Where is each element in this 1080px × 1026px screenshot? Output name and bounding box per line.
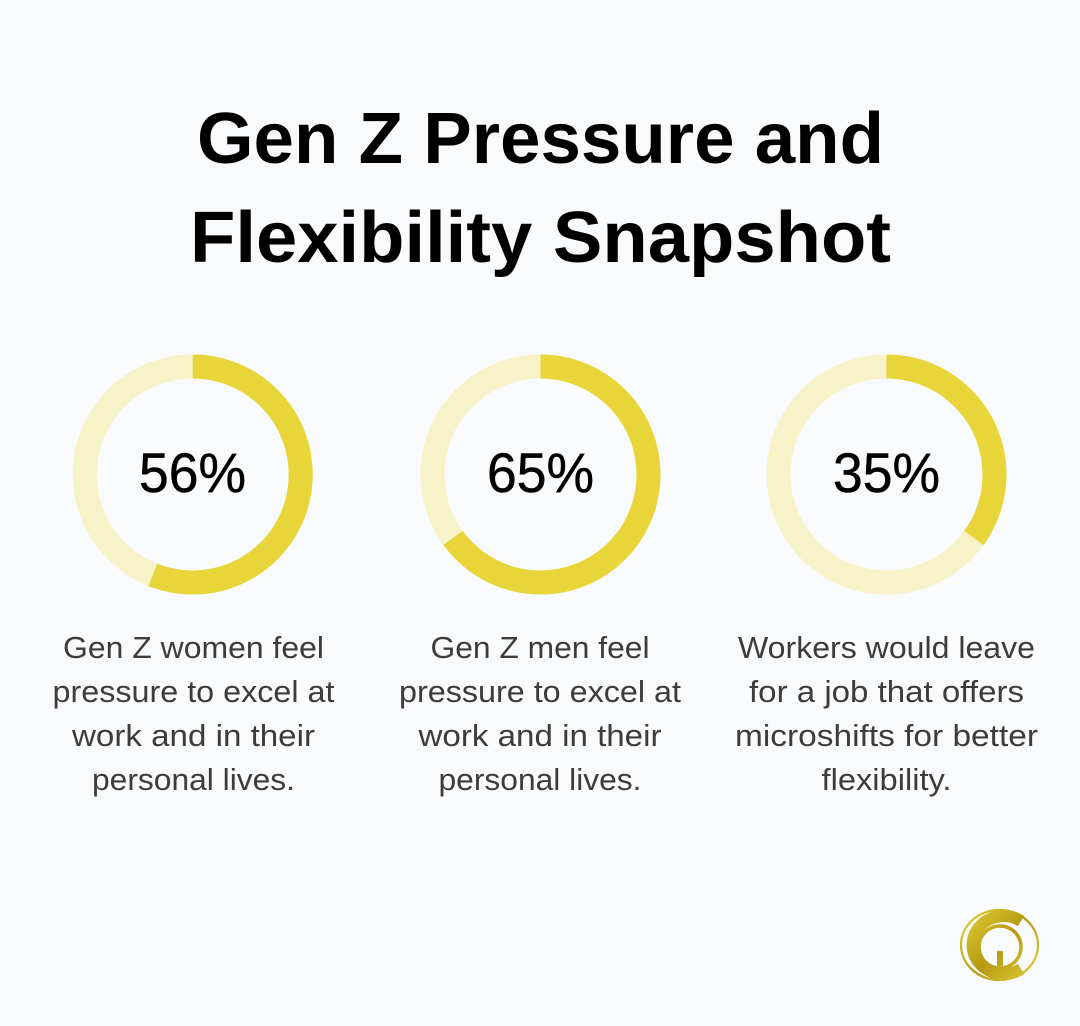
donut chart: 56%: [85, 366, 301, 582]
description: women: personal lives.: [92, 762, 295, 797]
panel: 65% men: [399, 366, 681, 797]
description: women: Gen Z women feel: [63, 630, 324, 665]
description: workers: microshifts for better: [735, 718, 1038, 753]
description: men: personal lives.: [438, 762, 642, 797]
donut chart: 35%: [778, 366, 994, 582]
description: workers: Workers would leave: [738, 630, 1035, 665]
icon: CQ logo: [961, 910, 1038, 980]
description: workers: for a job that offers: [749, 674, 1024, 709]
description: men: pressure to excel at: [399, 674, 681, 709]
title: Flexibility Snapshot: [190, 198, 891, 278]
donut chart: 65%: [432, 366, 648, 582]
panel: 35% workers: [735, 366, 1038, 797]
description: women: work and in their: [71, 718, 315, 753]
description: men: Gen Z men feel: [430, 630, 650, 665]
description: women: [52, 630, 335, 797]
value: 35%: 35%: [833, 441, 940, 504]
title: Gen Z Pressure and: [197, 99, 884, 179]
value: 65%: 65%: [487, 441, 594, 504]
description: workers: flexibility.: [822, 762, 952, 797]
panel: 56% women: [52, 366, 335, 797]
title: [190, 99, 891, 278]
value: 56%: 56%: [139, 441, 246, 504]
description: workers: [735, 630, 1038, 797]
description: women: pressure to excel at: [52, 674, 335, 709]
description: men: work and in their: [417, 718, 662, 753]
description: men: [399, 630, 681, 797]
